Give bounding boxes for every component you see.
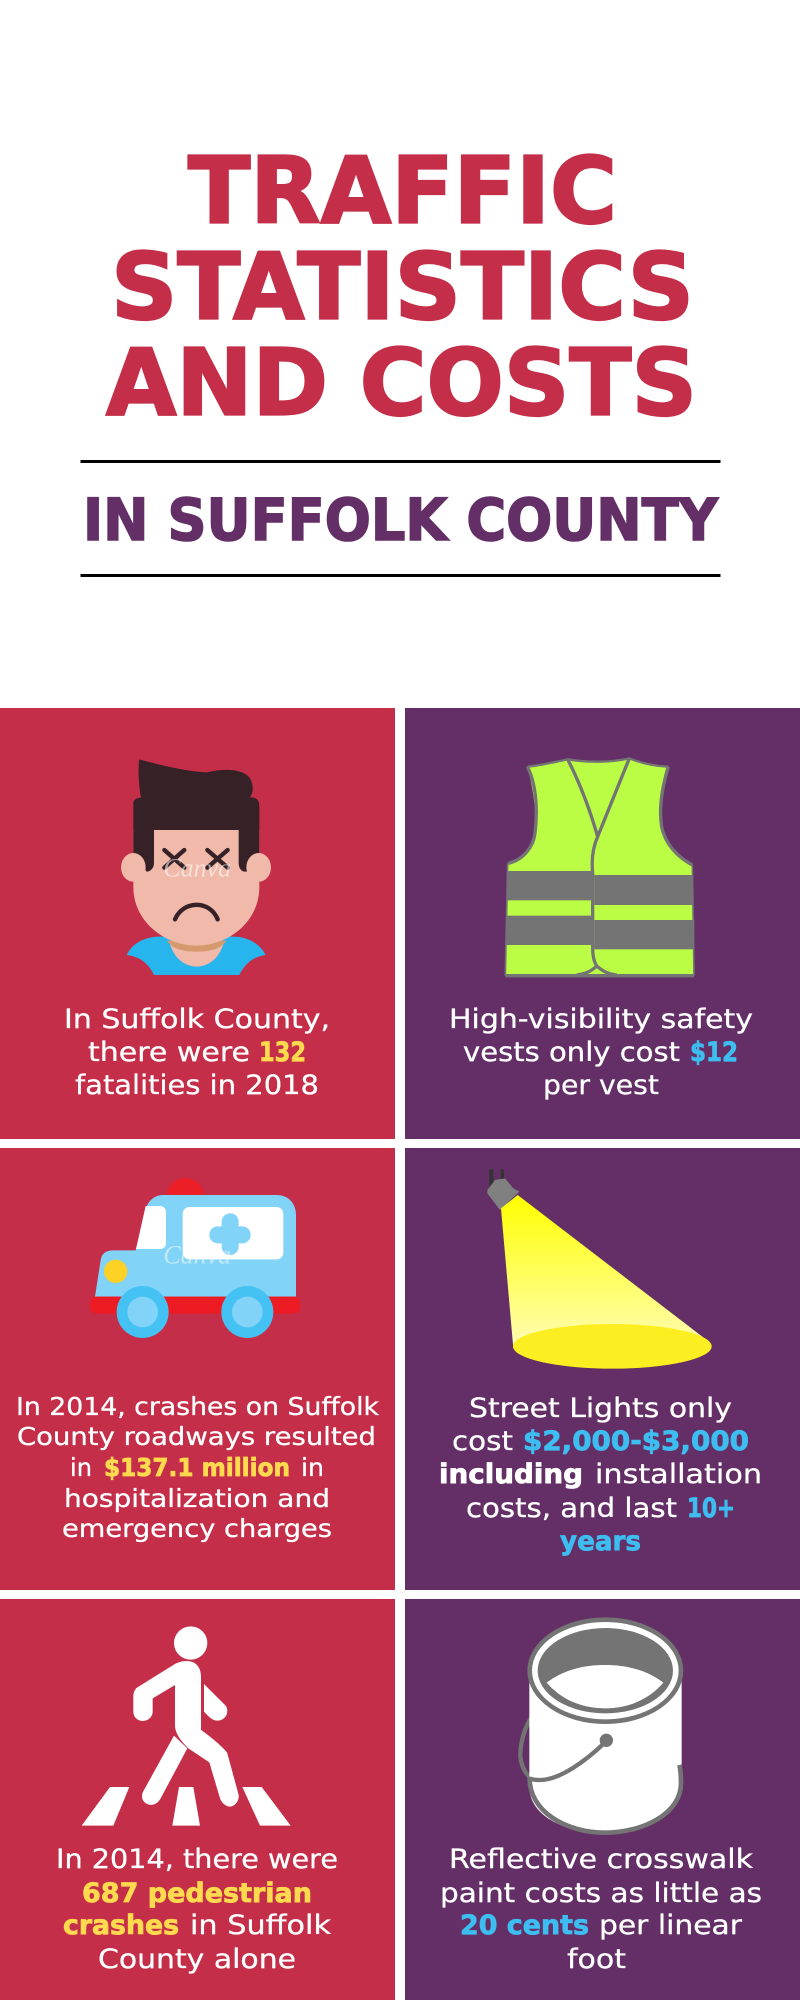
icon: dead face [121,759,271,975]
text: safety vests: vests only cost [463,1037,680,1068]
title [106,138,697,436]
text: street lights: including [439,1459,583,1490]
panel: fatalities [0,708,395,1139]
panel: safety vests [405,708,800,1139]
text: street lights: cost [452,1426,513,1457]
text: pedestrian crashes: In 2014, there were [56,1844,338,1875]
text: crosswalk paint [440,1844,762,1975]
text: fatalities [64,1004,330,1101]
text: crosswalk paint: 20 cents [460,1910,589,1941]
icon: pedestrian on crosswalk [82,1626,291,1826]
text: safety vests: per vest [543,1070,659,1101]
text: hospital charges: in [70,1453,92,1482]
icon: ambulance [90,1178,300,1338]
icon: paint bucket [520,1617,683,1833]
text: street lights: Street Lights only [469,1393,732,1424]
text: crosswalk paint: Reflective crosswalk [449,1844,753,1875]
text: hospital charges: in [301,1453,324,1482]
icon: street light [487,1169,712,1369]
text: pedestrian crashes: crashes [63,1910,179,1941]
text: pedestrian crashes: County alone [98,1944,296,1975]
text: hospital charges: $137.1 million [104,1453,290,1482]
title: AND COSTS [106,330,697,436]
text: crosswalk paint: per linear [599,1910,743,1941]
text: crosswalk paint: foot [567,1944,626,1975]
text: street lights: 10+ [687,1493,735,1524]
text: crosswalk paint: paint costs as little as [440,1878,762,1909]
text: street lights: years [560,1526,641,1557]
text: fatalities: 132 [259,1037,306,1068]
text: hospital charges [16,1392,380,1543]
text: fatalities: there were [88,1037,250,1068]
text: street lights [439,1393,762,1557]
title: STATISTICS [111,234,694,340]
text: pedestrian crashes [56,1844,338,1975]
text: safety vests [449,1004,753,1101]
title: TRAFFIC [188,138,617,244]
panel: crosswalk paint [405,1599,800,2000]
subtitle with rules: IN SUFFOLK COUNTY [83,487,719,554]
text: fatalities: In Suffolk County, [64,1004,330,1035]
text: street lights: $2,000-$3,000 [523,1426,749,1457]
text: fatalities: fatalities in 2018 [75,1070,319,1101]
subtitle with rules [80,460,720,577]
panel: pedestrian crashes [0,1599,395,2000]
panel: hospital charges [0,1148,395,1590]
text: pedestrian crashes: in Suffolk [190,1910,331,1941]
text: hospital charges: County roadways resulted [17,1422,376,1451]
text: safety vests: High-visibility safety [449,1004,753,1035]
icon: ambulance: Canva [163,1240,231,1269]
text: hospital charges: emergency charges [62,1514,332,1543]
text: safety vests: $12 [690,1037,738,1068]
text: hospital charges: In 2014, crashes on Suffolk [16,1392,380,1421]
text: pedestrian crashes: 687 pedestrian [82,1878,312,1909]
text: street lights: costs, and last [466,1493,677,1524]
icon: safety vest [505,758,694,976]
panel: street lights [405,1148,800,1590]
icon: dead face: Canva [163,854,231,883]
text: street lights: installation [595,1459,762,1490]
text: hospital charges: hospitalization and [64,1484,330,1513]
